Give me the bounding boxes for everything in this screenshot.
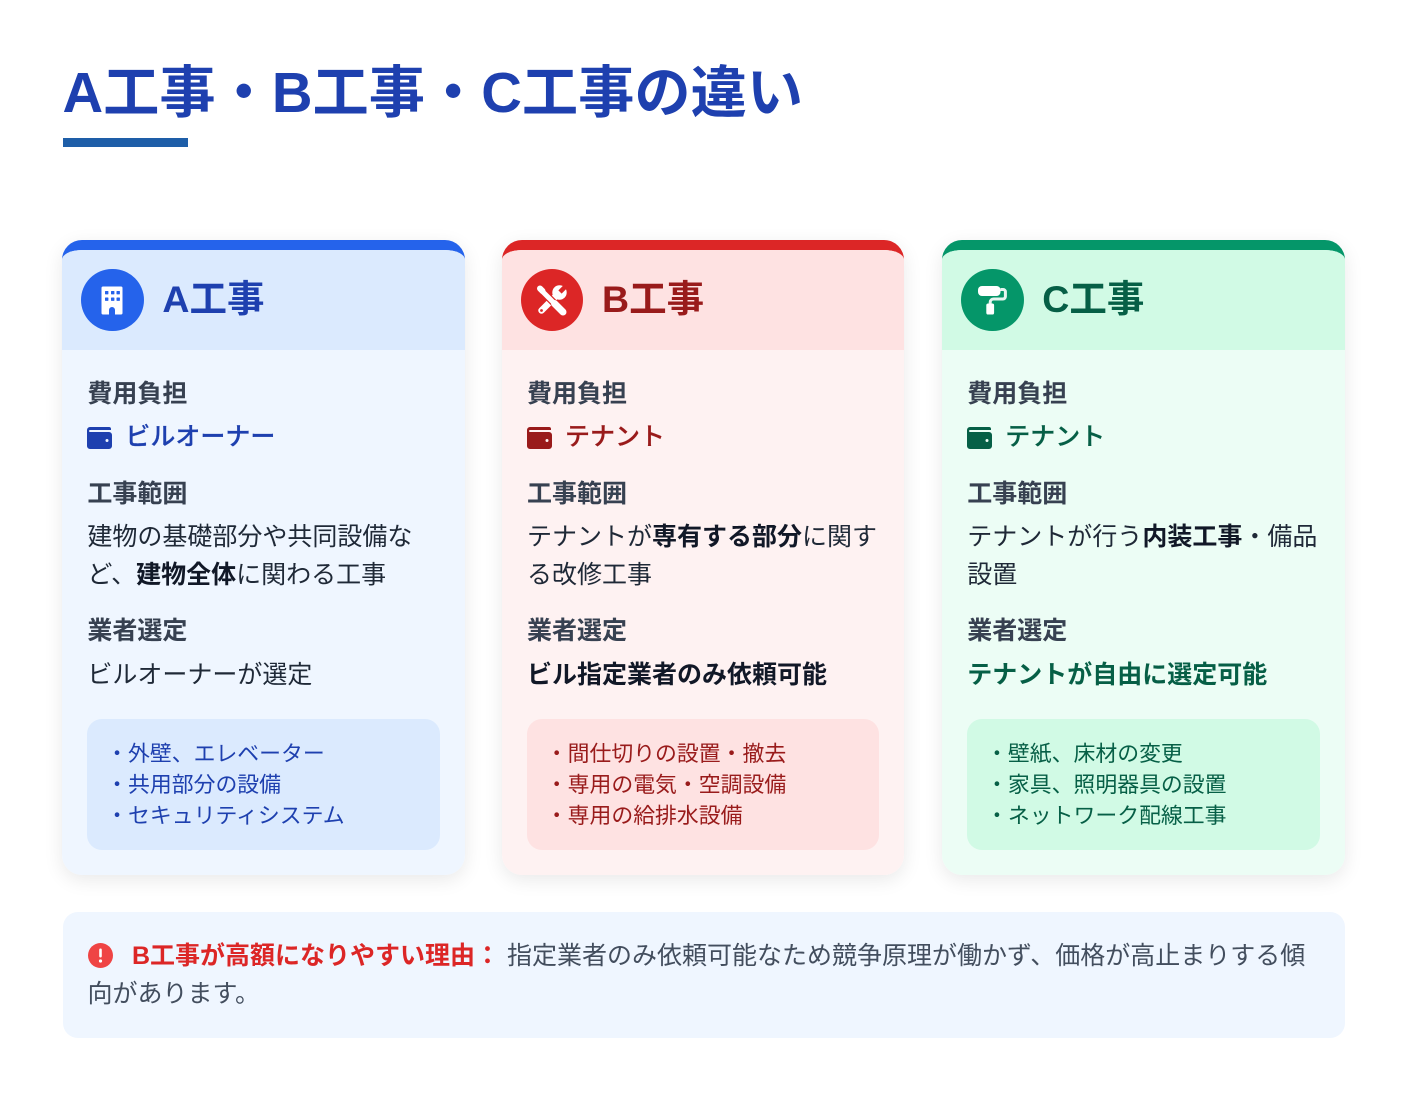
scope description: テナントが行う内装工事・備品 bbox=[967, 523, 1317, 551]
label: 費用負担: 費用負担 bbox=[967, 380, 1067, 408]
examples list bbox=[967, 719, 1320, 850]
cost bearer: テナント bbox=[967, 417, 1105, 453]
scope description: テナントが専有する部分に関す bbox=[527, 523, 877, 551]
examples list: ・専用の給排水設備 bbox=[546, 803, 742, 828]
examples list: ・セキュリティシステム bbox=[106, 803, 345, 828]
contractor selection: テナントが自由に選定可能 bbox=[967, 660, 1267, 688]
callout heading: B工事が高額になりやすい理由： bbox=[132, 942, 500, 970]
callout: B工事が高額になりやすい理由 bbox=[62, 912, 1344, 1038]
cost bearer: ビルオーナー bbox=[87, 417, 275, 453]
icon: tools bbox=[521, 269, 583, 331]
examples list: ・壁紙、床材の変更 bbox=[986, 741, 1183, 766]
heading: C工事: C工事 bbox=[1042, 278, 1144, 320]
label: 業者選定: 業者選定 bbox=[87, 617, 187, 645]
label: 業者選定: 業者選定 bbox=[527, 617, 627, 645]
contractor selection: ビル指定業者のみ依頼可能 bbox=[527, 660, 827, 688]
panel header: B工事 bbox=[502, 250, 904, 350]
label: 費用負担: 費用負担 bbox=[527, 380, 627, 408]
scope description: る改修工事 bbox=[527, 560, 652, 588]
scope description bbox=[527, 523, 877, 588]
examples list: ・ネットワーク配線工事 bbox=[986, 803, 1227, 828]
title underline bbox=[62, 138, 188, 147]
examples list: ・間仕切りの設置・撤去 bbox=[546, 741, 786, 766]
scope description: 建物の基礎部分や共同設備な bbox=[87, 523, 412, 551]
scope description bbox=[87, 523, 412, 588]
panel: A工事 bbox=[62, 240, 465, 875]
scope description: 設置 bbox=[967, 560, 1017, 588]
callout text: 指定業者のみ依頼可能なため競争原理が働かず、価格が高止まりする傾 bbox=[507, 942, 1305, 970]
label: 費用負担: 費用負担 bbox=[87, 380, 187, 408]
panel: C工事: テナント bbox=[1005, 417, 1105, 453]
examples list: ・家具、照明器具の設置 bbox=[986, 772, 1227, 797]
cost bearer: テナント bbox=[527, 417, 665, 453]
scope description: ど、建物全体に関わる工事 bbox=[87, 560, 386, 588]
examples list bbox=[87, 719, 440, 850]
contractor selection: ビルオーナーが選定 bbox=[87, 660, 312, 688]
heading: B工事: B工事 bbox=[602, 278, 704, 320]
title: A工事・B工事・C工事の違い bbox=[62, 60, 803, 124]
heading: A工事: A工事 bbox=[162, 278, 264, 320]
panel header: A工事 bbox=[62, 250, 465, 350]
label: 工事範囲: 工事範囲 bbox=[967, 480, 1067, 508]
panel: A工事: ビルオーナー bbox=[125, 417, 275, 453]
examples list bbox=[527, 719, 879, 850]
panel header: C工事 bbox=[942, 250, 1345, 350]
icon: paint roller bbox=[961, 269, 1024, 331]
scope description bbox=[967, 523, 1317, 588]
panel: B工事 bbox=[502, 240, 904, 875]
examples list: ・共用部分の設備 bbox=[106, 772, 281, 797]
label: 工事範囲: 工事範囲 bbox=[527, 480, 627, 508]
panel: B工事: テナント bbox=[565, 417, 665, 453]
callout text: 向があります。 bbox=[88, 980, 260, 1008]
label: 業者選定: 業者選定 bbox=[967, 617, 1067, 645]
icon: building bbox=[81, 269, 144, 331]
label: 工事範囲: 工事範囲 bbox=[87, 480, 187, 508]
icon: exclamation bbox=[88, 943, 113, 968]
examples list: ・専用の電気・空調設備 bbox=[546, 772, 786, 797]
examples list: ・外壁、エレベーター bbox=[106, 741, 325, 766]
callout text bbox=[88, 942, 1305, 1008]
panel: C工事 bbox=[942, 240, 1345, 875]
